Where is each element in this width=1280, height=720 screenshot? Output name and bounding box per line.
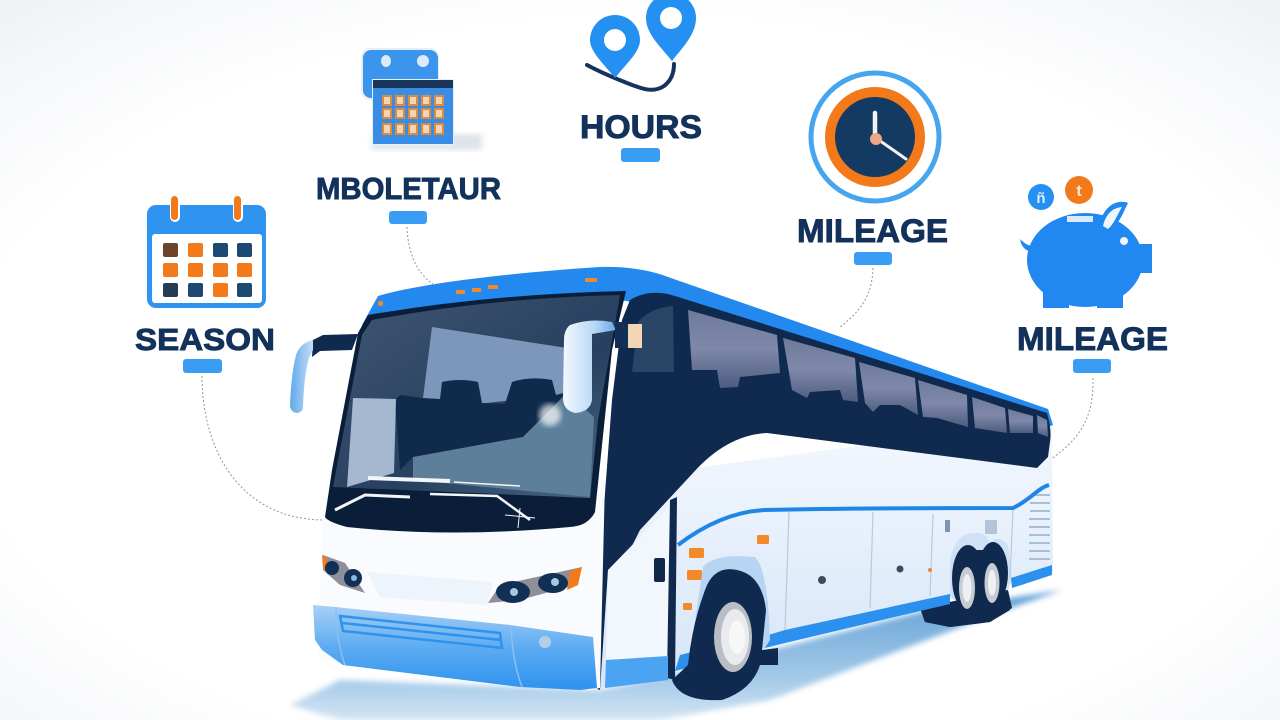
rear wheel well and hubs: [920, 533, 1012, 627]
lower glass panel: [413, 393, 594, 497]
label: season: SEASON: [135, 322, 275, 357]
front pillar window: [632, 306, 674, 372]
label: mileage two: MILEAGE: [1017, 321, 1168, 357]
blue door sill: [605, 656, 668, 688]
right headlight: [488, 567, 582, 603]
orange roof lights: [378, 278, 597, 306]
front wheel: [672, 569, 778, 700]
icon: clock: [811, 73, 939, 201]
door handle: [654, 558, 665, 582]
front wheel arch: [690, 556, 770, 668]
pill: hours: [621, 148, 660, 162]
dark window band and pillar: [595, 293, 1051, 690]
side windows: [688, 310, 1048, 437]
bumper: [313, 605, 597, 690]
rear vent: [1029, 495, 1050, 559]
ground shadow: [290, 590, 1062, 720]
side accent stripe: [678, 485, 1049, 545]
icon: piggy bank: [1020, 176, 1152, 308]
windshield reflection: [420, 327, 567, 410]
right mirror: [563, 321, 642, 413]
seats silhouette: [395, 378, 567, 470]
bottom blue sill: [675, 565, 1052, 671]
left mirror: [290, 334, 358, 413]
door edge: [667, 497, 677, 680]
door: [606, 503, 673, 660]
icon: season calendar: [147, 194, 266, 308]
bus illustration: [290, 267, 1053, 700]
roof: [362, 267, 1053, 430]
headlamp glint on glass: [539, 404, 561, 426]
left glass panel: [347, 398, 396, 487]
label: operator: MBOLETAUR: [316, 171, 501, 206]
pill: season: [183, 359, 222, 373]
bumper seams and fog lamp: [336, 607, 551, 687]
dashed connector lines: [202, 227, 1093, 520]
windshield surround: [325, 291, 626, 532]
icon: piggy bank: t: [1076, 183, 1082, 200]
icon: route pins: [587, 0, 696, 90]
label: hours: HOURS: [580, 109, 702, 145]
side details: [818, 520, 997, 584]
pill: mileage two: [1073, 359, 1111, 373]
windshield wipers: [335, 478, 535, 528]
pill: mileage one: [854, 252, 892, 265]
front white fascia: [313, 480, 605, 690]
orange side markers: [683, 535, 769, 610]
luggage panel seams: [785, 510, 1013, 630]
icon: piggy bank: ñ: [1036, 190, 1046, 207]
pill: operator: [389, 211, 427, 224]
bus side body: [600, 420, 1053, 688]
lower fascia panel: [367, 572, 493, 605]
windshield glass: [333, 295, 620, 498]
grille: [340, 616, 502, 648]
icon: operator calendar: [361, 48, 482, 150]
rear wheels: [920, 542, 1010, 627]
label: mileage one: MILEAGE: [797, 213, 948, 249]
left headlight: [322, 555, 365, 593]
